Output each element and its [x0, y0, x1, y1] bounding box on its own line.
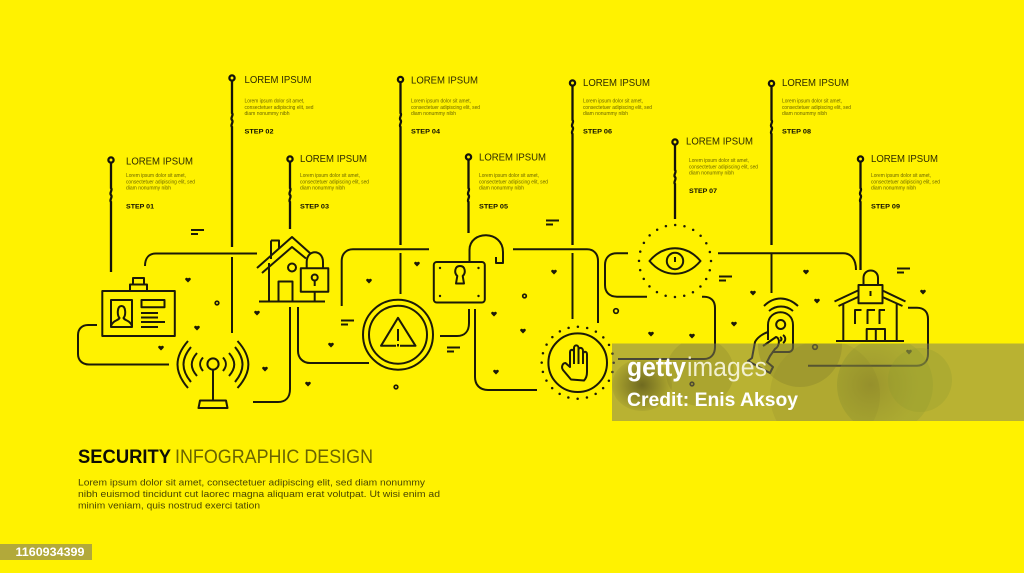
step 05 callout: LOREM IPSUM	[479, 152, 546, 164]
step 07 callout	[672, 136, 758, 219]
step 07 callout: consectetuer adipiscing elit, sed	[689, 164, 758, 170]
step 05 callout: Lorem ipsum dolor sit amet,	[479, 173, 539, 179]
step 08 callout: consectetuer adipiscing elit, sed	[782, 105, 851, 111]
decorative hearts and dots	[158, 262, 926, 389]
step 09 callout: STEP 09	[871, 204, 900, 210]
icon: eye in dotted circle	[639, 225, 711, 297]
icon: key fob with hand	[748, 298, 798, 373]
description text: nibh euismod tincidunt cut laorec magna aliquam erat volutpat. Ut wisi enim ad	[78, 489, 440, 500]
step 03 callout: consectetuer adipiscing elit, sed	[300, 179, 369, 185]
step 09 callout	[858, 153, 940, 270]
step 07 callout: Lorem ipsum dolor sit amet,	[689, 158, 749, 164]
step 06 callout: diam nonummy nibh	[583, 111, 628, 117]
step 04 callout: STEP 04	[411, 128, 440, 136]
image id tag: 1160934399	[16, 547, 84, 559]
step 01 callout: Lorem ipsum dolor sit amet,	[126, 173, 186, 179]
step 07 callout: LOREM IPSUM	[686, 136, 753, 148]
step 04 callout: LOREM IPSUM	[411, 74, 478, 86]
step 08 callout: STEP 08	[782, 128, 811, 136]
step 08 callout: diam nonummy nibh	[782, 111, 827, 117]
step 01 callout: consectetuer adipiscing elit, sed	[126, 179, 195, 185]
step 06 callout: LOREM IPSUM	[583, 77, 650, 89]
title: SECURITY	[78, 447, 171, 468]
step 09 callout: Lorem ipsum dolor sit amet,	[871, 173, 931, 179]
step 06 callout: consectetuer adipiscing elit, sed	[583, 105, 652, 111]
step 04 callout: consectetuer adipiscing elit, sed	[411, 105, 480, 111]
step 02 callout: STEP 02	[244, 128, 274, 136]
icon: stop hand in dotted circle	[542, 327, 614, 399]
icon: radio antenna	[178, 341, 248, 408]
decorative dashes	[191, 220, 910, 352]
connector paths	[78, 249, 928, 402]
step 03 callout	[287, 153, 369, 229]
watermark panel: getty	[627, 352, 686, 382]
step 05 callout: STEP 05	[479, 204, 508, 210]
step 02 callout: LOREM IPSUM	[244, 74, 312, 86]
step 01 callout: LOREM IPSUM	[126, 156, 193, 168]
step 06 callout	[570, 77, 652, 245]
step 07 callout: diam nonummy nibh	[689, 170, 734, 176]
icon: open padlock	[434, 235, 503, 302]
step 08 callout: LOREM IPSUM	[782, 77, 849, 89]
step 03 callout: STEP 03	[300, 204, 329, 210]
step 03 callout: Lorem ipsum dolor sit amet,	[300, 173, 360, 179]
step 02 callout: consectetuer adipiscing elit, sed	[244, 105, 314, 111]
step 08 callout: Lorem ipsum dolor sit amet,	[782, 98, 842, 104]
step 02 callout	[229, 74, 314, 247]
step 04 callout	[398, 74, 480, 245]
step 01 callout: STEP 01	[126, 204, 154, 210]
description text: minim veniam, quis nostrud exerci tation	[78, 500, 260, 512]
step 05 callout	[466, 152, 548, 233]
icon: house with padlock	[257, 237, 328, 302]
step 09 callout: diam nonummy nibh	[871, 185, 916, 191]
step 09 callout: consectetuer adipiscing elit, sed	[871, 179, 940, 185]
step 09 callout: LOREM IPSUM	[871, 153, 938, 165]
icon: warning sign	[363, 300, 433, 370]
watermark panel: Credit: Enis Aksoy	[627, 390, 798, 411]
description text: Lorem ipsum dolor sit amet, consectetuer adipiscing elit, sed diam nonummy	[78, 478, 425, 488]
title	[78, 447, 373, 468]
step 06 callout: STEP 06	[583, 128, 612, 136]
description text	[78, 478, 440, 512]
step 03 callout: diam nonummy nibh	[300, 185, 345, 191]
watermark panel	[612, 344, 1024, 421]
step 04 callout: diam nonummy nibh	[411, 111, 456, 117]
image id tag	[0, 544, 92, 560]
step 03 callout: LOREM IPSUM	[300, 153, 367, 165]
step 01 callout	[108, 156, 195, 272]
icon: id badge	[102, 278, 175, 336]
step 05 callout: consectetuer adipiscing elit, sed	[479, 179, 548, 185]
step 08 callout	[769, 77, 851, 245]
watermark panel: images	[687, 352, 767, 382]
step 06 callout: Lorem ipsum dolor sit amet,	[583, 98, 643, 104]
step 07 callout: STEP 07	[689, 188, 717, 195]
step 04 callout: Lorem ipsum dolor sit amet,	[411, 98, 471, 104]
step 02 callout: diam nonummy nibh	[244, 111, 290, 117]
title: INFOGRAPHIC DESIGN	[175, 447, 373, 468]
step 02 callout: Lorem ipsum dolor sit amet,	[244, 98, 304, 104]
step 05 callout: diam nonummy nibh	[479, 185, 524, 191]
step 01 callout: diam nonummy nibh	[126, 185, 171, 191]
icon: locked building	[834, 270, 906, 341]
